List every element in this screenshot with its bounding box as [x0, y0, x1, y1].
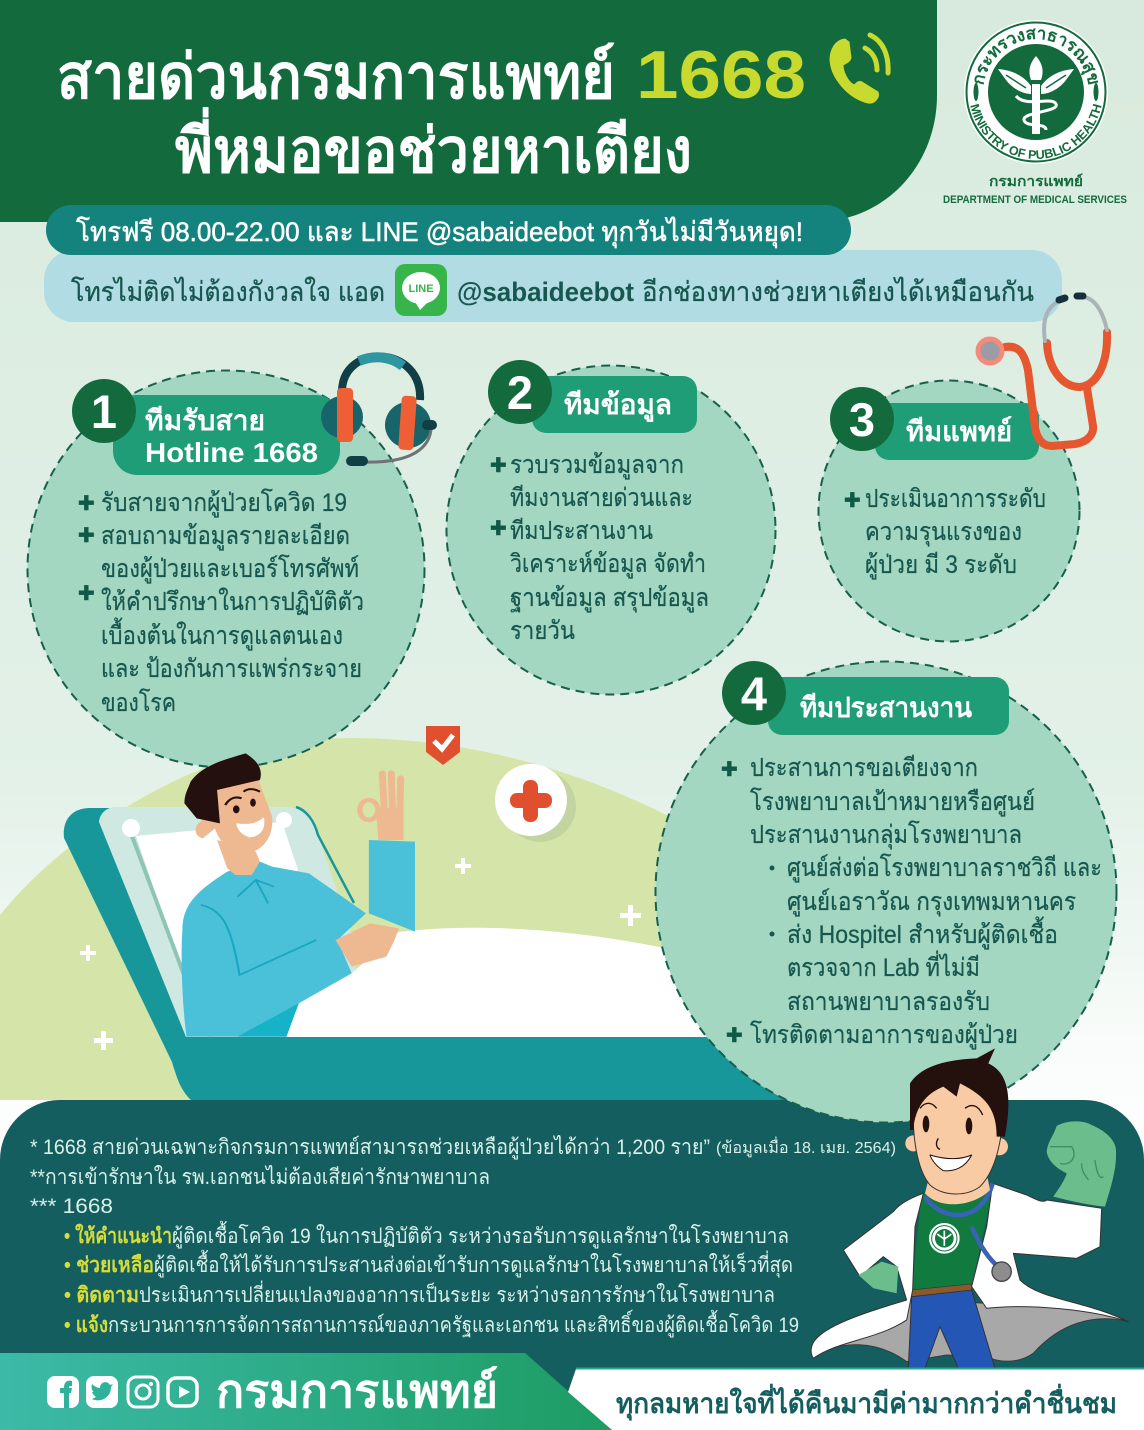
logo side leaves [974, 83, 1098, 101]
title: พี่หมอขอช่วยหาเตียง [175, 107, 692, 186]
panel: team 1 hotline [28, 370, 424, 768]
bed cushion [99, 807, 355, 1037]
number 4: 4 [741, 667, 767, 720]
team 2 text: ✚ [490, 516, 507, 540]
team 3 text: ผู้ป่วย มี 3 ระดับ [865, 551, 1017, 580]
patient figure [182, 753, 415, 1037]
icon: LINE [395, 264, 447, 316]
label pill 4 [768, 677, 1009, 735]
team 4 text: ประสานงานกลุ่มโรงพยาบาล [750, 820, 1022, 850]
team 4 text: โรงพยาบาลเป้าหมายหรือศูนย์ [750, 787, 1035, 817]
team 3 text: ความรุนแรงของ [865, 518, 1022, 547]
team 3 text: ประเมินอาการระดับ [865, 485, 1046, 513]
team 3 text [844, 485, 1046, 580]
label pill 3: ทีมแพทย์ [906, 416, 1012, 447]
team 1 text: สอบถามข้อมูลรายละเอียด [101, 522, 350, 551]
icon: shield [426, 726, 460, 765]
number 3: 3 [849, 393, 875, 446]
illustration: superhero doctor [811, 1048, 1128, 1368]
footer: tagline: ทุกลมหายใจที่ได้คืนมามีค่ามากกว่าคำชื่นชม [616, 1383, 1117, 1421]
trousers [908, 1290, 995, 1368]
stethoscope [925, 1183, 998, 1267]
team 4 text: ✚ [726, 1023, 743, 1047]
pill: LINE channel [44, 250, 1062, 322]
footnote text: ผู้ติดเชื้อโควิด 19 ในการปฏิบัติตัว ระหว่างรอรับการดูแลรักษาในโรงพยาบาล [172, 1221, 789, 1249]
title: 1668 [636, 37, 806, 113]
team 4 text: ส่ง Hospitel สำหรับผู้ติดเชื้อ [787, 916, 1058, 950]
pill: free call hours: โทรฟรี 08.00-22.00 และ LINE @sabaideebot ทุกวันไม่มีวันหยุด! [76, 217, 803, 249]
team 4 text: ศูนย์ส่งต่อโรงพยาบาลราชวิถี และ [787, 853, 1102, 883]
logo: Ministry of Public Health: กระทรวงสาธารณสุข [974, 28, 1098, 85]
footnote text [30, 1135, 896, 1338]
logo: Ministry of Public Health [964, 20, 1108, 164]
panel: team 3 doctors [818, 380, 1080, 642]
shirt badge [929, 1223, 960, 1254]
team 1 text: ของผู้ป่วยและเบอร์โทรศัพท์ [101, 554, 359, 584]
team 2 text: ฐานข้อมูล สรุปข้อมูล [510, 584, 709, 613]
team 2 text: ✚ [490, 453, 507, 477]
footnote text: • ติดตาม [64, 1284, 139, 1307]
footnote text: ประเมินการเปลี่ยนแปลงของอาการเป็นระยะ ระหว่างรอการรักษาในโรงพยาบาล [139, 1280, 775, 1307]
cape [813, 1299, 1128, 1362]
team 2 text [490, 451, 709, 645]
footnote text: • ให้คำแนะนำ [64, 1223, 172, 1248]
team 1 text: เบื้องต้นในการดูแลตนเอง [101, 617, 343, 651]
label pill 4: ทีมประสานงาน [800, 692, 972, 723]
pill: LINE channel: โทรไม่ติดไม่ต้องกังวลใจ แอด [71, 276, 385, 307]
team 2 text: วิเคราะห์ข้อมูล จัดทำ [510, 550, 706, 579]
gloves [858, 1262, 898, 1293]
ok hand [376, 808, 404, 840]
header banner [0, 0, 937, 222]
team 1 text [78, 488, 364, 717]
number 2: 2 [507, 366, 533, 419]
panel: team 4 coordination [656, 661, 1116, 1122]
team 3 text: ✚ [844, 488, 861, 512]
sparkles [80, 858, 641, 1050]
team 4 text: ตรวจจาก Lab ที่ไม่มี [787, 950, 980, 982]
pill: LINE channel: @sabaideebot [457, 277, 634, 307]
neck, ears, face [925, 1173, 990, 1204]
team 4 text: โทรติดตามอาการของผู้ป่วย [750, 1020, 1018, 1050]
icon: headset [321, 357, 437, 466]
hill background [0, 738, 680, 1100]
number 1 [72, 379, 136, 443]
label pill 2 [532, 376, 697, 433]
pill: LINE channel: อีกช่องทางช่วยหาเตียงได้เหมือนกัน [642, 277, 1034, 307]
footer: social bar: กรมการแพทย์ [216, 1365, 498, 1417]
footer: tagline [568, 1368, 1144, 1430]
coat right [972, 1183, 1128, 1322]
blanket [286, 928, 716, 1037]
footnote text: * 1668 สายด่วนเฉพาะกิจกรมการแพทย์สามารถช่วยเหลือผู้ป่วยได้กว่า 1,200 ราย” [30, 1135, 710, 1160]
team 4 text: ✚ [721, 757, 738, 781]
team 2 text: ทีมงานสายด่วนและ [510, 484, 693, 512]
bed cushion edge [296, 807, 354, 903]
team 1 text: ให้คำปรึกษาในการปฏิบัติตัว [101, 587, 364, 616]
logo caption [943, 173, 1127, 206]
team 1 text: ✚ [78, 523, 95, 547]
team 1 text: รับสายจากผู้ป่วยโควิด 19 [101, 488, 347, 518]
icon: medical cross [495, 764, 576, 842]
emblem: winged staff [998, 56, 1074, 134]
footnote text: กระบวนการการจัดการสถานการณ์ของภาครัฐและเอกชน และสิทธิ์ของผู้ติดเชื้อโควิด 19 [108, 1309, 799, 1338]
team 4 text: ประสานการขอเตียงจาก [750, 754, 978, 782]
social icons [47, 1376, 197, 1408]
belt [912, 1284, 972, 1297]
footer: social bar [0, 1353, 612, 1430]
number 3 [830, 387, 894, 451]
shirt [912, 1187, 993, 1292]
label pill 3 [875, 403, 1039, 460]
team 1 text: ของโรค [101, 688, 176, 717]
footnote text: **การเข้ารักษาใน รพ.เอกชนไม่ต้องเสียค่ารักษาพยาบาล [30, 1165, 490, 1189]
footnote text: ผู้ติดเชื้อให้ได้รับการประสานส่งต่อเข้ารับการดูแลรักษาในโรงพยาบาลให้เร็วที่สุด [154, 1250, 793, 1278]
facial features [923, 1116, 929, 1132]
team 1 text: ✚ [78, 491, 95, 515]
hair [910, 1048, 1008, 1137]
logo caption: DEPARTMENT OF MEDICAL SERVICES [943, 194, 1127, 206]
footnote text: • ช่วยเหลือ [64, 1253, 154, 1277]
number 2 [488, 360, 552, 424]
logo caption: กรมการแพทย์ [989, 173, 1083, 189]
team 2 text: รวบรวมข้อมูลจาก [510, 451, 684, 480]
footnote text: • แจ้ง [64, 1313, 108, 1337]
illustration: patient in bed [64, 753, 800, 1100]
pill: free call hours [46, 205, 851, 255]
pillow [136, 822, 298, 975]
footnote text: (ข้อมูลเมื่อ 18. เมย. 2564) [716, 1136, 896, 1158]
icon: phone [830, 35, 888, 103]
number 4 [722, 661, 786, 725]
bed frame [64, 808, 800, 1100]
team 2 text: ทีมประสานงาน [510, 517, 653, 545]
logo: Ministry of Public Health: MINISTRY OF PUBLIC HEALTH [970, 104, 1102, 159]
team 4 text: สถานพยาบาลรองรับ [787, 988, 990, 1016]
label pill 1: ทีมรับสาย [145, 405, 265, 436]
number 1: 1 [91, 385, 117, 438]
team 1 text: ✚ [78, 581, 95, 605]
icon: LINE: LINE [408, 283, 434, 295]
team 4 text [721, 754, 1102, 1050]
resting hand [335, 923, 399, 967]
label pill 1: Hotline 1668 [145, 437, 318, 468]
footnote text: *** 1668 [30, 1195, 113, 1218]
icon: stethoscope [978, 296, 1107, 446]
team 4 text: ศูนย์เอราวัณ กรุงเทพมหานคร [787, 888, 1076, 917]
panel: team 2 data [446, 360, 776, 694]
label pill 2: ทีมข้อมูล [564, 389, 672, 422]
title [57, 37, 806, 186]
panel: footnotes [0, 1100, 1144, 1430]
team 1 text: และ ป้องกันการแพร่กระจาย [101, 655, 362, 683]
title: สายด่วนกรมการแพทย์ [57, 42, 615, 112]
label pill 1 [113, 395, 340, 475]
coat left [811, 1193, 923, 1358]
team 2 text: รายวัน [510, 617, 575, 645]
